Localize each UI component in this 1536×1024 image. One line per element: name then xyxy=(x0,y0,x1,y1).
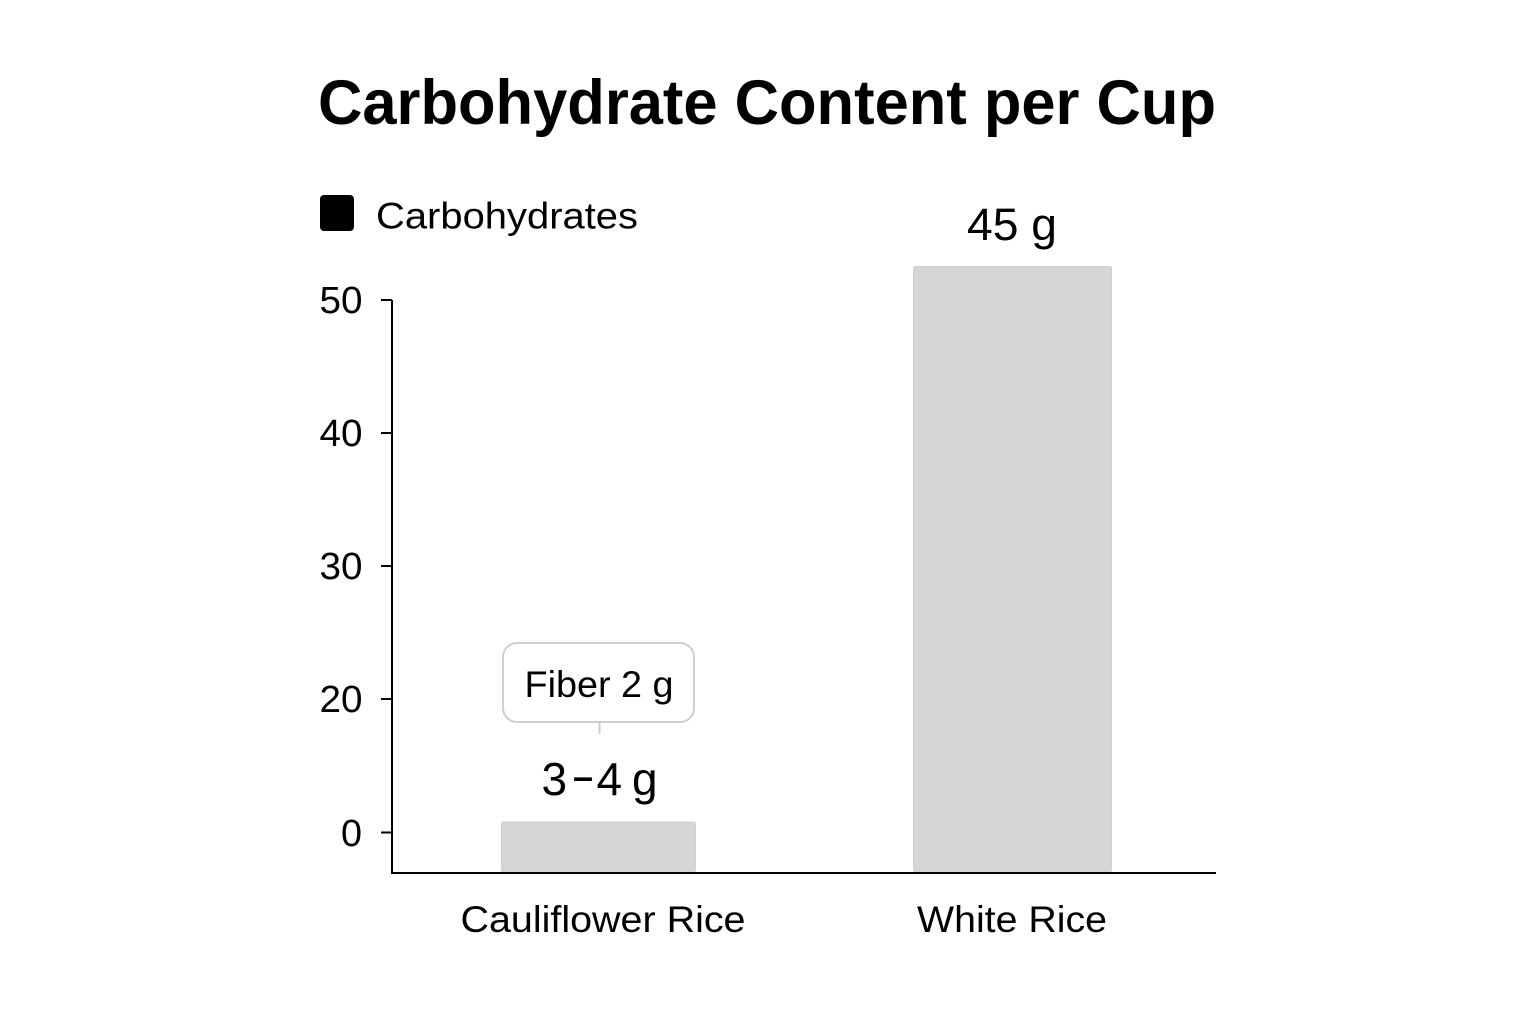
value label: cauliflower rice: 4 xyxy=(596,753,622,805)
value label: white rice: 45 g xyxy=(967,199,1057,250)
title: Carbohydrate Content per Cup xyxy=(318,68,1216,138)
legend xyxy=(320,195,638,236)
x axis xyxy=(391,872,1216,874)
bar: cauliflower rice xyxy=(502,822,696,872)
y axis: 20 xyxy=(320,679,362,721)
y axis: 40 xyxy=(320,413,362,455)
y axis xyxy=(320,280,392,873)
y axis: 30 xyxy=(320,546,362,588)
y axis: 0 xyxy=(341,813,362,855)
category label: white rice: White Rice xyxy=(917,899,1107,940)
value label: cauliflower rice: 3 xyxy=(542,753,567,805)
callout: fiber xyxy=(503,643,694,734)
legend label: Carbohydrates xyxy=(376,196,638,236)
callout: fiber: Fiber 2 g xyxy=(524,664,674,705)
category label: cauliflower rice: Cauliflower Rice xyxy=(460,899,746,940)
value label: cauliflower rice: g xyxy=(632,753,658,805)
y axis: 50 xyxy=(320,280,362,322)
legend swatch xyxy=(320,195,354,231)
bar: white rice xyxy=(914,266,1112,872)
value label: cauliflower rice: – xyxy=(573,756,593,797)
